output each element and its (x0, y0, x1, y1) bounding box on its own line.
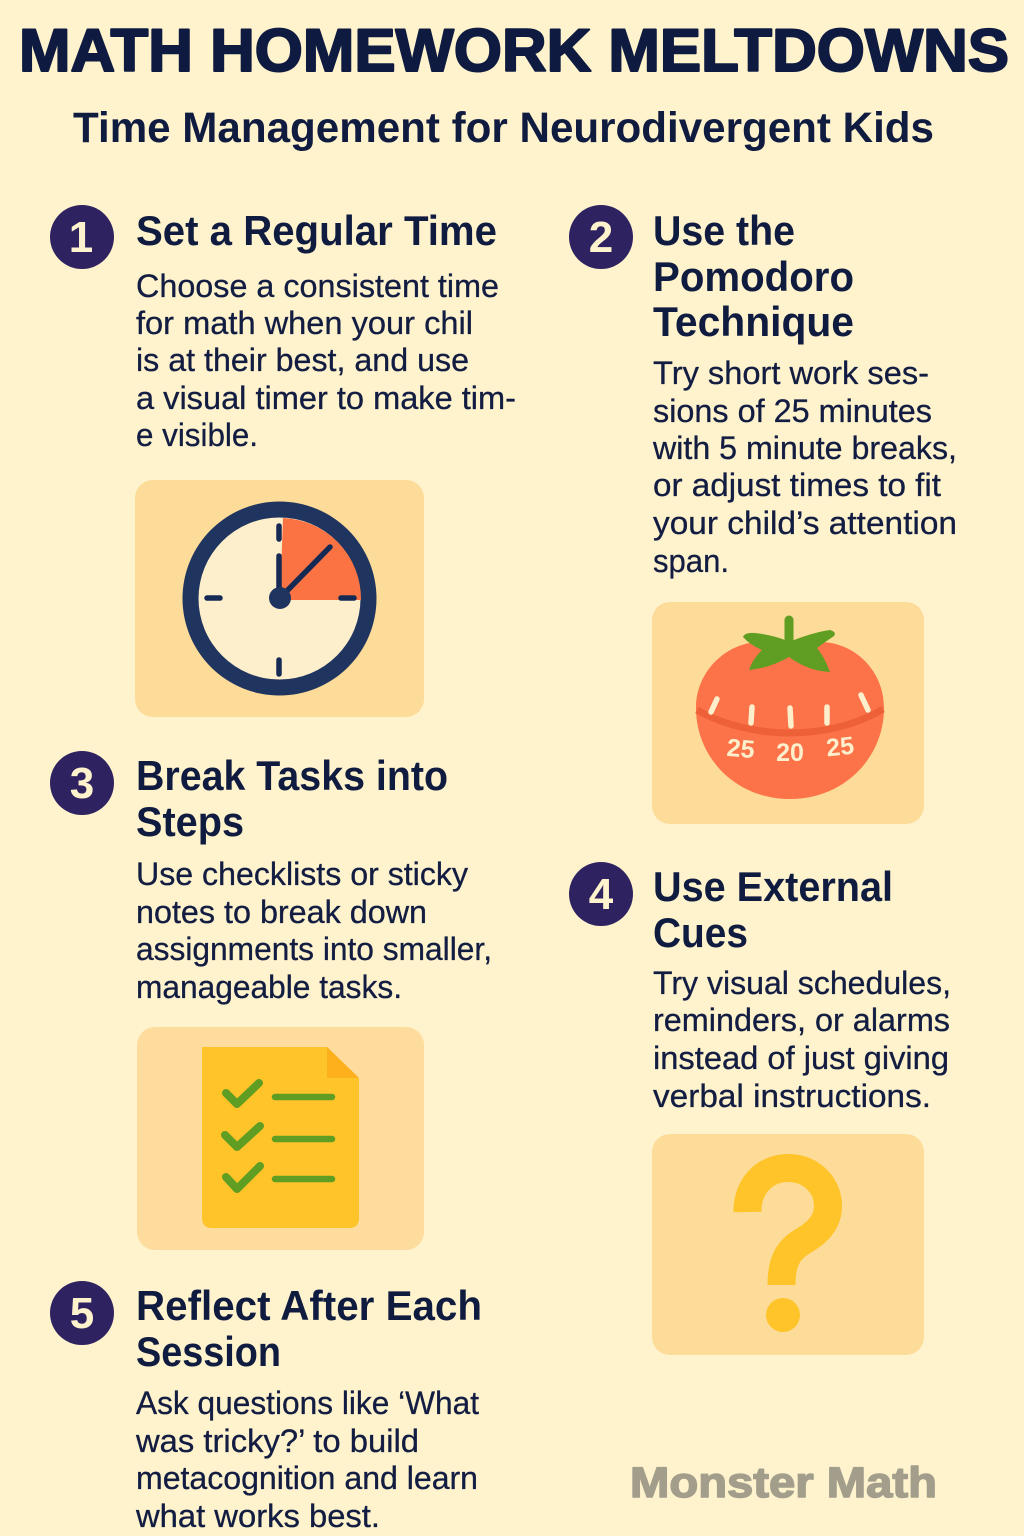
icon: question mark on tile (652, 1134, 924, 1355)
heading 1: Set a Regular Time (136, 207, 497, 254)
step 3: break tasks into steps (50, 751, 492, 1250)
heading 2 (653, 207, 854, 345)
brand wordmark: Monster Math (630, 1459, 937, 1507)
body text 1: a visual timer to make tim- (136, 380, 516, 416)
number badge 4 (569, 862, 633, 926)
body text 3: notes to break down (136, 894, 427, 930)
body text 5 (135, 1385, 479, 1534)
body text 5: what works best. (135, 1498, 380, 1534)
heading 5 (136, 1282, 482, 1375)
body text 2: sions of 25 minutes (653, 393, 932, 429)
number badge 4: 4 (589, 870, 614, 919)
body text 4: reminders, or alarms (653, 1002, 950, 1038)
icon: tomato timer on tile: 20 (776, 739, 804, 767)
number badge 2 (569, 205, 633, 269)
body text 2: span. (653, 543, 729, 579)
step 1: set a regular time (50, 205, 516, 717)
number badge 5 (50, 1281, 114, 1345)
body text 2 (652, 355, 957, 579)
body text 1 (136, 268, 516, 453)
heading 2: Pomodoro (653, 253, 854, 300)
number badge 1: 1 (69, 213, 93, 262)
body text 4 (653, 965, 951, 1114)
body text 3: Use checklists or sticky (136, 856, 468, 892)
body text 3 (136, 856, 492, 1005)
heading 3 (136, 752, 448, 845)
icon: tomato timer on tile: 25 (726, 734, 756, 764)
title: MATH HOMEWORK MELTDOWNS (19, 17, 1009, 84)
body text 5: Ask questions like ‘What (136, 1385, 479, 1421)
body text 3: assignments into smaller, (136, 931, 492, 967)
body text 3: manageable tasks. (136, 969, 402, 1005)
body text 1: for math when your chil (136, 305, 473, 341)
heading 4: Cues (653, 909, 748, 956)
number badge 3 (50, 751, 114, 815)
body text 2: Try short work ses- (653, 355, 929, 391)
body text 2: with 5 minute breaks, (652, 430, 957, 466)
step 2: pomodoro technique (569, 205, 957, 824)
number badge 2: 2 (589, 213, 613, 262)
body text 2: your child’s attention (653, 505, 957, 541)
heading 2: Use the (653, 207, 795, 254)
number badge 5: 5 (70, 1289, 94, 1338)
number badge 3: 3 (70, 759, 94, 808)
icon: clock with shaded quarter on tile (135, 480, 424, 717)
icon: tomato timer on tile (652, 602, 924, 824)
heading 4 (653, 863, 893, 956)
body text 5: was tricky?’ to build (135, 1423, 419, 1459)
heading 5: Session (136, 1328, 281, 1375)
body text 2: or adjust times to fit (653, 467, 941, 503)
body text 1: e visible. (136, 417, 258, 453)
step 4: use external cues (569, 862, 951, 1355)
body text 4: verbal instructions. (653, 1078, 931, 1114)
step 5: reflect after each session (50, 1281, 482, 1534)
icon: tomato timer on tile: 25 (825, 732, 856, 762)
heading 3: Break Tasks into (136, 752, 448, 799)
subtitle: Time Management for Neurodivergent Kids (73, 104, 934, 152)
body text 5: metacognition and learn (136, 1460, 478, 1496)
heading 3: Steps (136, 798, 244, 845)
heading 2: Technique (653, 298, 854, 345)
body text 4: instead of just giving (653, 1040, 949, 1076)
heading 4: Use External (653, 863, 893, 910)
heading 5: Reflect After Each (136, 1282, 482, 1329)
number badge 1 (50, 205, 114, 269)
body text 1: Choose a consistent time (136, 268, 499, 304)
body text 4: Try visual schedules, (653, 965, 951, 1001)
body text 1: is at their best, and use (136, 342, 469, 378)
icon: checklist document on tile (137, 1027, 424, 1250)
